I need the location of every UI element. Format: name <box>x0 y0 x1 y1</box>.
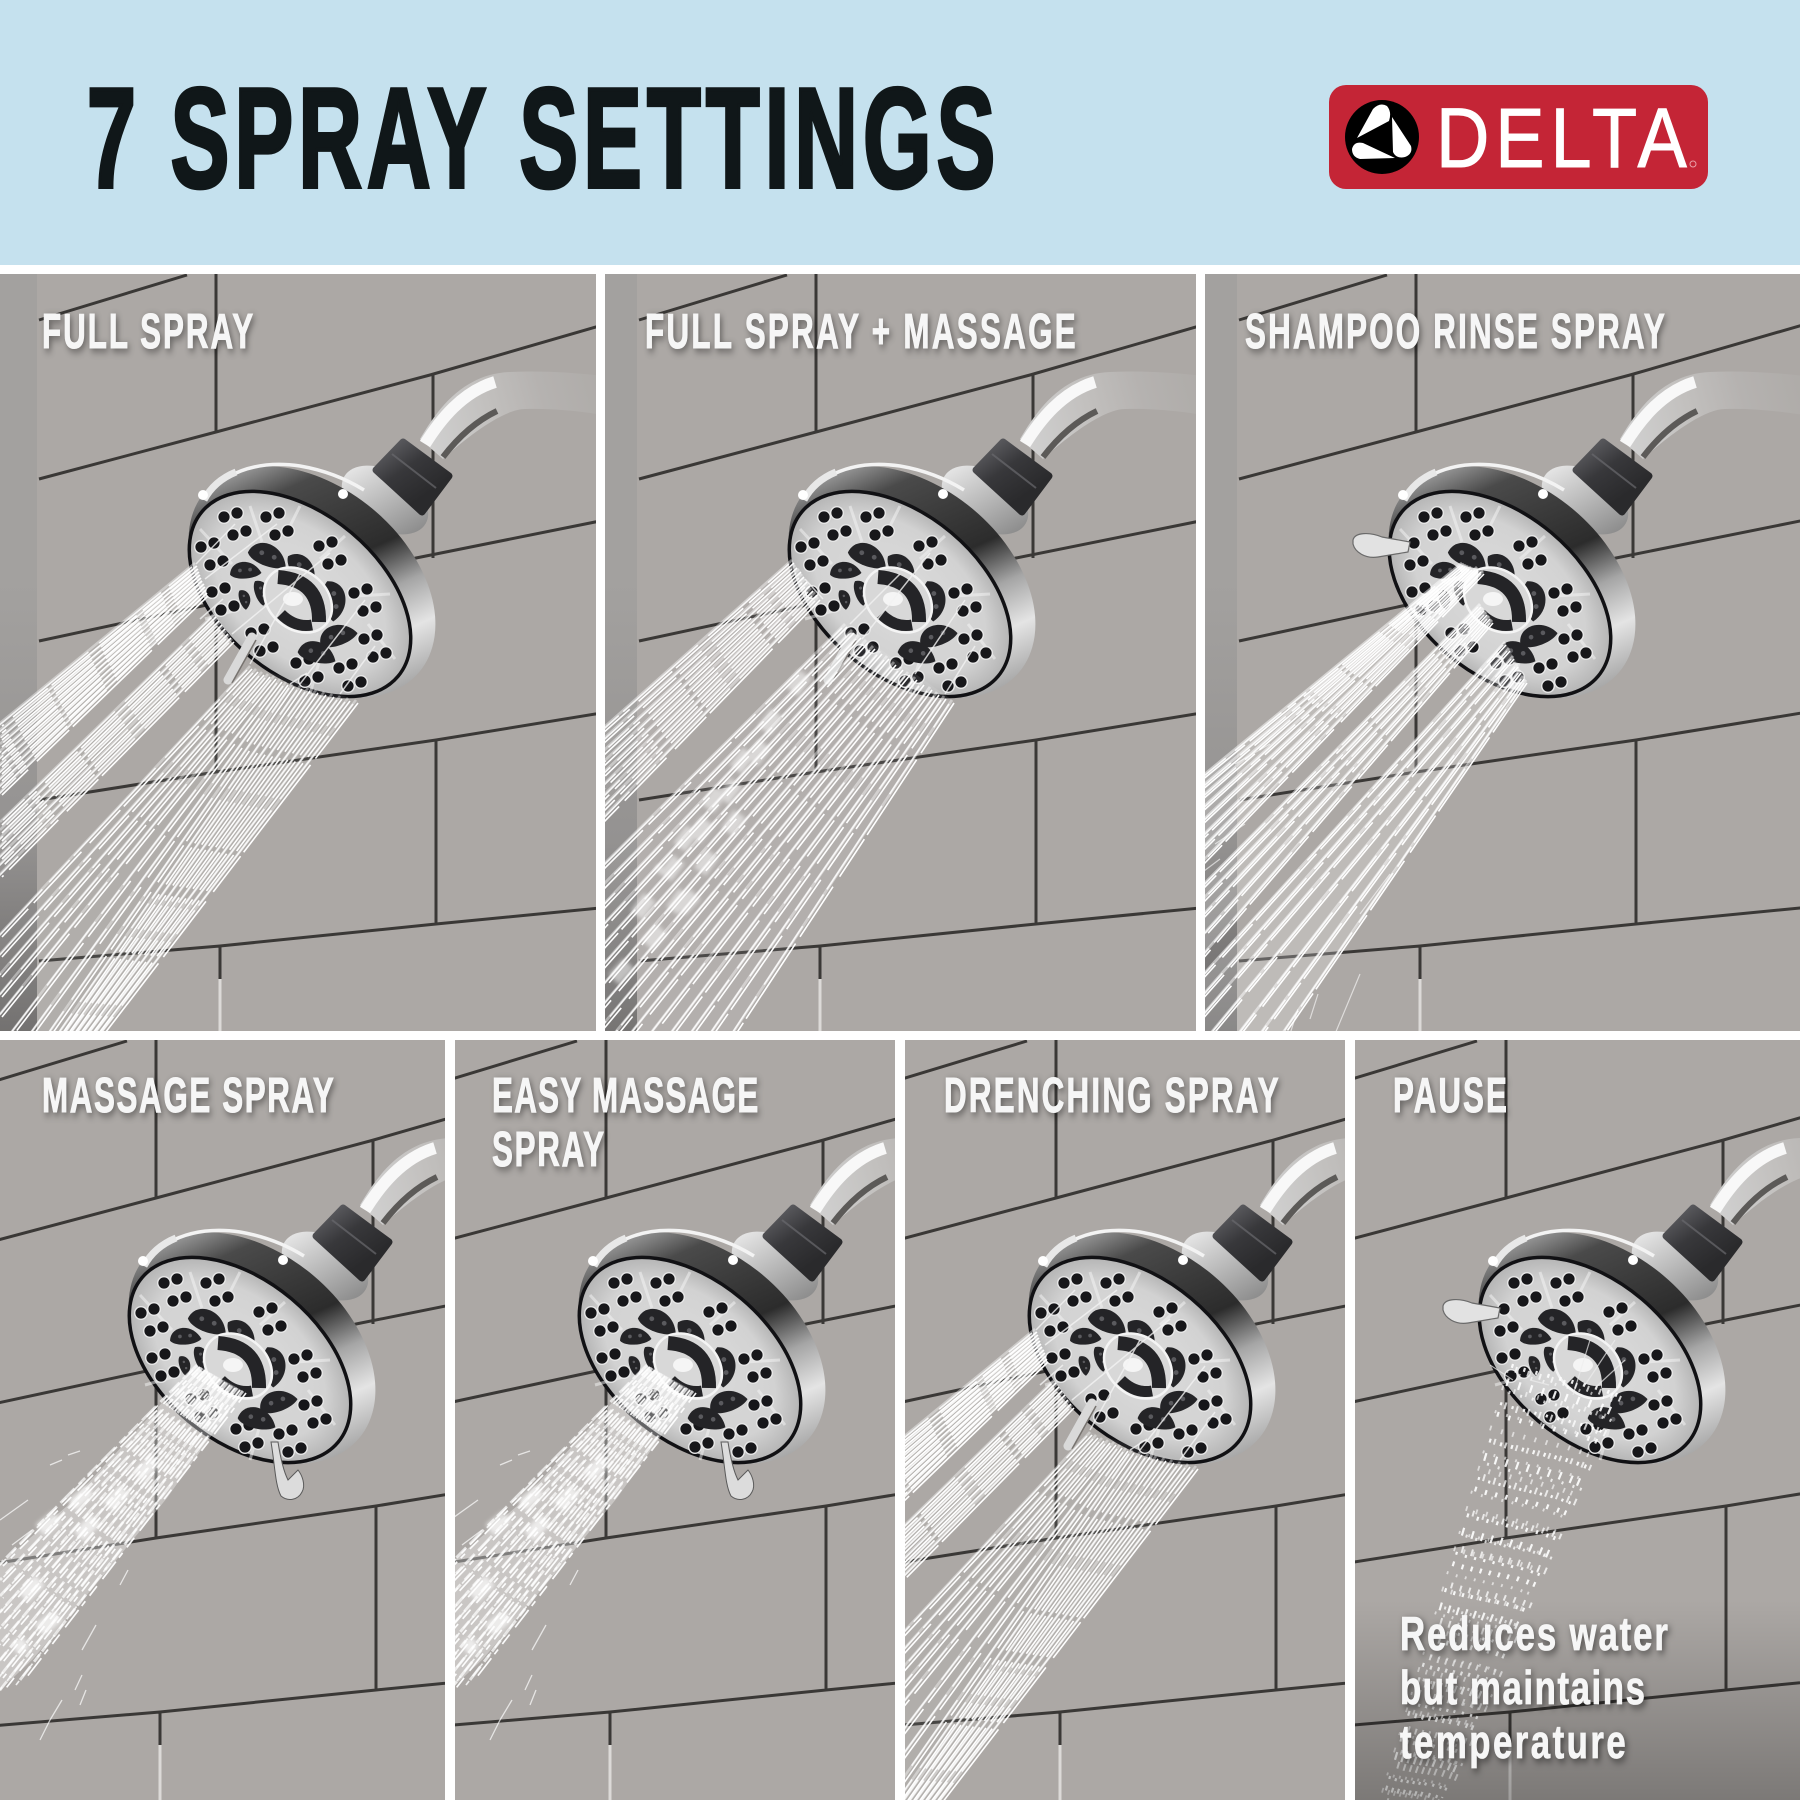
note: reduces water: Reduces water <box>1400 1608 1668 1660</box>
panel: drenching spray <box>905 1040 1345 1800</box>
label: shampoo rinse spray: SHAMPOO RINSE SPRAY <box>1245 304 1665 359</box>
header band <box>0 0 1800 265</box>
water spray <box>597 553 975 1038</box>
lever <box>271 1442 304 1499</box>
shower head <box>744 371 1220 745</box>
water spray <box>1198 563 1527 1037</box>
note: reduces water <box>1400 1608 1668 1768</box>
label: easy massage spray: SPRAY <box>492 1122 604 1177</box>
lever <box>228 637 256 683</box>
title: 7 SPRAY SETTINGS <box>87 60 995 218</box>
label: massage spray: MASSAGE SPRAY <box>42 1068 334 1123</box>
shower head <box>984 1137 1460 1511</box>
note: reduces water: but maintains <box>1400 1662 1645 1714</box>
lever <box>828 637 856 683</box>
water spray <box>446 1365 696 1740</box>
panel: easy massage spray <box>455 1040 895 1800</box>
label: full spray plus massage: FULL SPRAY + MASSAGE <box>645 304 1076 359</box>
lever <box>1443 1300 1500 1323</box>
label: full spray: FULL SPRAY <box>42 304 253 359</box>
label: easy massage spray: EASY MASSAGE <box>492 1068 758 1123</box>
water spray <box>837 1290 1215 1800</box>
label: easy massage spray <box>492 1068 758 1177</box>
shower head <box>1434 1137 1800 1511</box>
label: pause: PAUSE <box>1393 1068 1507 1123</box>
lever <box>721 1442 754 1499</box>
lever <box>1068 1403 1096 1449</box>
logo: Delta <box>1329 85 1708 189</box>
panel: massage spray <box>0 1040 445 1800</box>
panel: full spray <box>0 274 596 1031</box>
water trickle <box>1378 1340 1625 1800</box>
label: drenching spray: DRENCHING SPRAY <box>944 1068 1279 1123</box>
water spray <box>0 1365 246 1740</box>
shower head <box>144 371 620 745</box>
water spray <box>0 524 375 1038</box>
panel: shampoo rinse spray <box>1205 274 1800 1031</box>
panel: full spray plus massage <box>605 274 1196 1031</box>
shower head <box>534 1137 1010 1511</box>
lever <box>1353 534 1410 557</box>
logo: Delta: DELTA <box>1436 91 1687 185</box>
shower head <box>1344 371 1800 745</box>
note: reduces water: temperature <box>1400 1716 1626 1768</box>
shower head <box>84 1137 560 1511</box>
panel: pause <box>1355 1040 1800 1800</box>
